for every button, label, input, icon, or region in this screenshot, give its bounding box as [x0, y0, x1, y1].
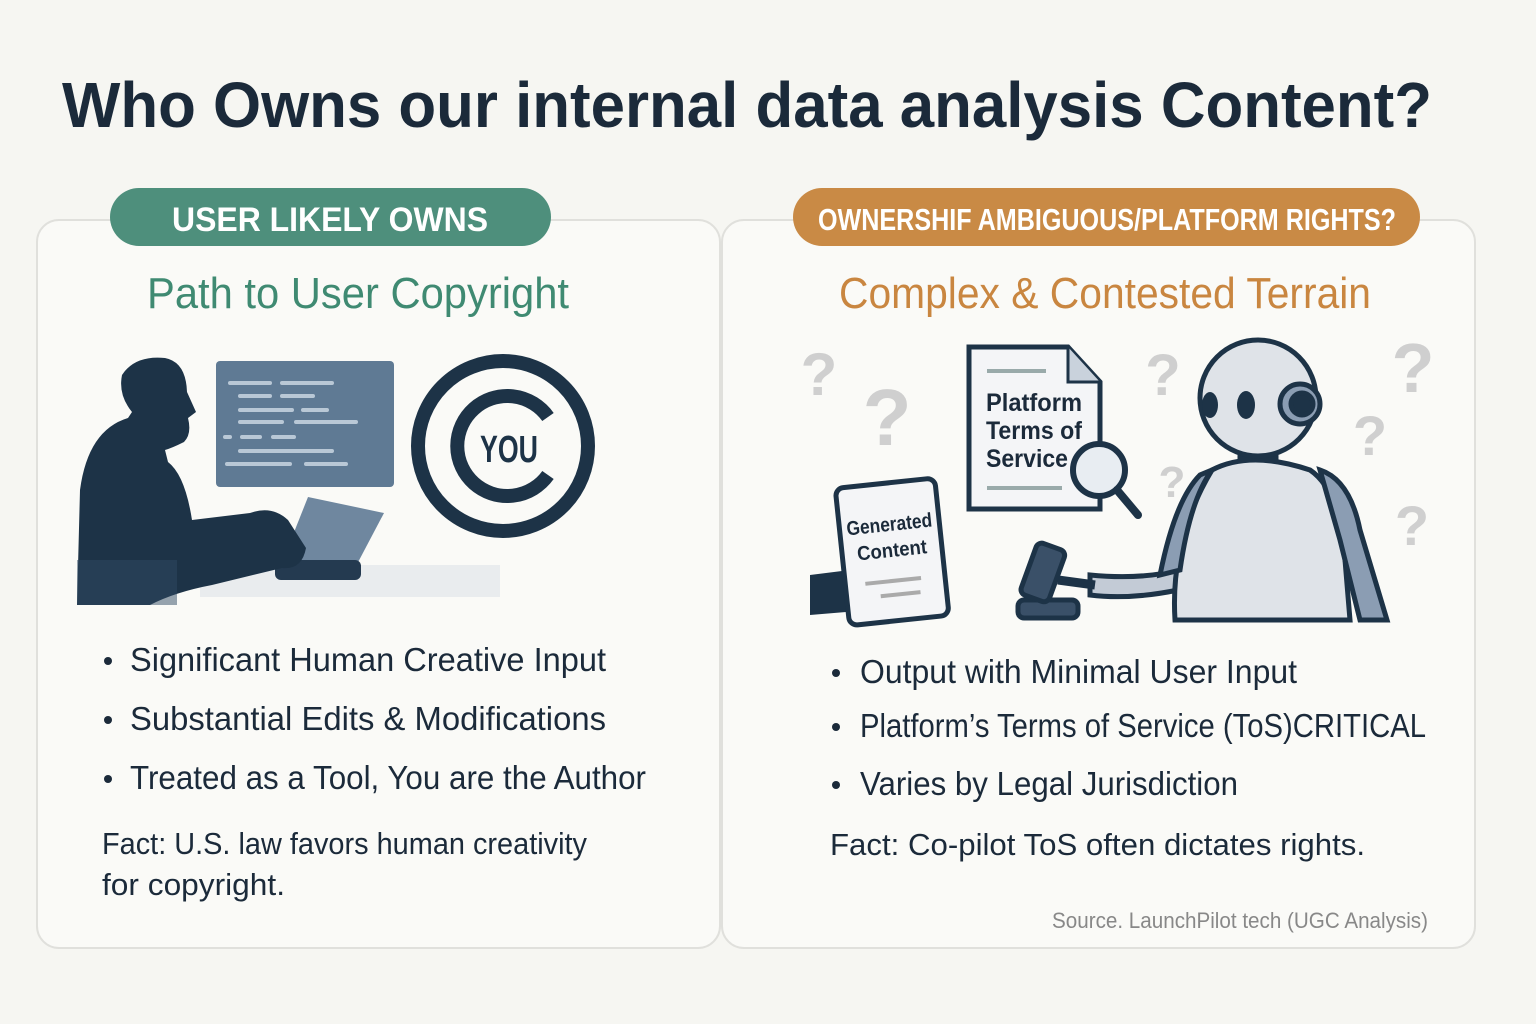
bullet list: user owns: Substantial Edits & Modifications — [130, 700, 606, 737]
fact: user owns: for copyright. — [102, 867, 285, 902]
source note: Source. LaunchPilot tech (UGC Analysis) — [1052, 908, 1428, 933]
badge: user likely owns: USER LIKELY OWNS — [172, 201, 488, 239]
illustration: terms of service document — [969, 347, 1138, 515]
subtitle: complex terrain: Complex & Contested Terrain — [839, 269, 1371, 318]
icons: question marks: ? — [1145, 343, 1181, 408]
icons: question marks: ? — [1395, 494, 1429, 557]
title: Who Owns our internal data analysis Content? — [62, 69, 1432, 141]
illustration: terms of service document: Service — [986, 445, 1068, 473]
bullet list: user owns: Significant Human Creative Input — [130, 641, 606, 678]
icons: question marks: ? — [801, 341, 837, 408]
bullet list: ambiguous: Platform’s Terms of Service (ToS)CRITICAL — [860, 707, 1426, 744]
fact: ambiguous: Fact: Co-pilot ToS often dictates rights. — [830, 827, 1365, 862]
illustration: terms of service document: Platform — [986, 389, 1082, 417]
bullet list: user owns — [104, 641, 646, 796]
icons: question marks: ? — [863, 373, 911, 462]
bullet list: ambiguous: Output with Minimal User Input — [860, 653, 1297, 690]
icon: copyright you: YOU — [480, 429, 538, 471]
badge: user likely owns — [110, 188, 551, 246]
icons: question marks: ? — [1392, 329, 1434, 407]
icons: question marks: ? — [1159, 458, 1185, 507]
bullet list: ambiguous — [832, 653, 1426, 802]
icon: copyright you — [418, 361, 588, 531]
illustration: terms of service document: Terms of — [986, 417, 1083, 445]
badge: ownership ambiguous — [793, 188, 1420, 246]
subtitle: path to user copyright: Path to User Copyright — [147, 269, 569, 318]
icons: question marks: ? — [1353, 404, 1387, 467]
panel: user likely owns — [37, 188, 720, 948]
illustration: robot with gavel — [1018, 340, 1387, 620]
badge: ownership ambiguous: OWNERSHIF AMBIGUOUS/PLATFORM RIGHTS? — [818, 202, 1396, 237]
icons: question marks — [801, 329, 1434, 557]
bullet list: ambiguous: Varies by Legal Jurisdiction — [860, 765, 1238, 802]
fact: user owns — [102, 826, 587, 902]
illustration: generated content tablet: Content — [856, 536, 928, 565]
illustration: person at computer — [77, 358, 500, 605]
illustration: generated content tablet — [810, 478, 949, 626]
illustration: generated content tablet: Generated — [845, 510, 933, 540]
bullet list: user owns: Treated as a Tool, You are the Author — [130, 759, 646, 796]
fact: user owns: Fact: U.S. law favors human creativity — [102, 826, 587, 861]
panel: ownership ambiguous — [722, 188, 1475, 948]
